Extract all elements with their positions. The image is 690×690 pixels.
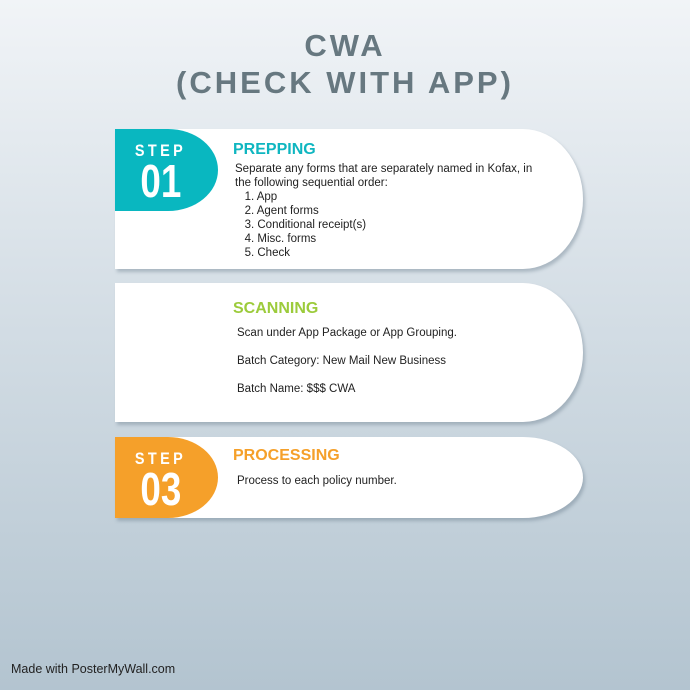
heading: scanning: SCANNING xyxy=(233,300,318,317)
title: CWA xyxy=(304,28,386,63)
footer credit: Made with PosterMyWall.com xyxy=(11,662,175,676)
text: scanning: Batch Category: New Mail New Business xyxy=(237,355,446,367)
panel: step 1 prepping xyxy=(115,129,583,269)
text: prepping: 5. Check xyxy=(245,247,290,259)
text: prepping xyxy=(235,163,532,259)
badge: step 03: 03 xyxy=(140,463,181,515)
badge: step 01: 01 xyxy=(140,155,181,207)
heading: processing: PROCESSING xyxy=(233,447,340,464)
badge: step 01 xyxy=(115,129,218,211)
title: (CHECK WITH APP) xyxy=(176,65,514,100)
text: scanning xyxy=(237,327,457,395)
title xyxy=(176,28,514,100)
text: scanning: Batch Name: $$$ CWA xyxy=(237,383,355,395)
text: prepping: 4. Misc. forms xyxy=(245,233,316,245)
badge: step 03: STEP xyxy=(135,449,186,468)
panel: step 3 processing xyxy=(115,437,583,518)
heading: prepping: PREPPING xyxy=(233,141,316,158)
badge: step 01: STEP xyxy=(135,141,186,160)
text: prepping: 1. App xyxy=(245,191,277,203)
text: scanning: Scan under App Package or App Grouping. xyxy=(237,327,457,339)
text: prepping: 3. Conditional receipt(s) xyxy=(245,219,366,231)
text: prepping: the following sequential order: xyxy=(235,177,388,189)
badge: step 03 xyxy=(115,437,218,518)
text: processing: Process to each policy number. xyxy=(237,475,397,487)
text: prepping: 2. Agent forms xyxy=(245,205,319,217)
panel: scanning xyxy=(115,283,583,422)
text: prepping: Separate any forms that are separately named in Kofax, in xyxy=(235,163,532,175)
